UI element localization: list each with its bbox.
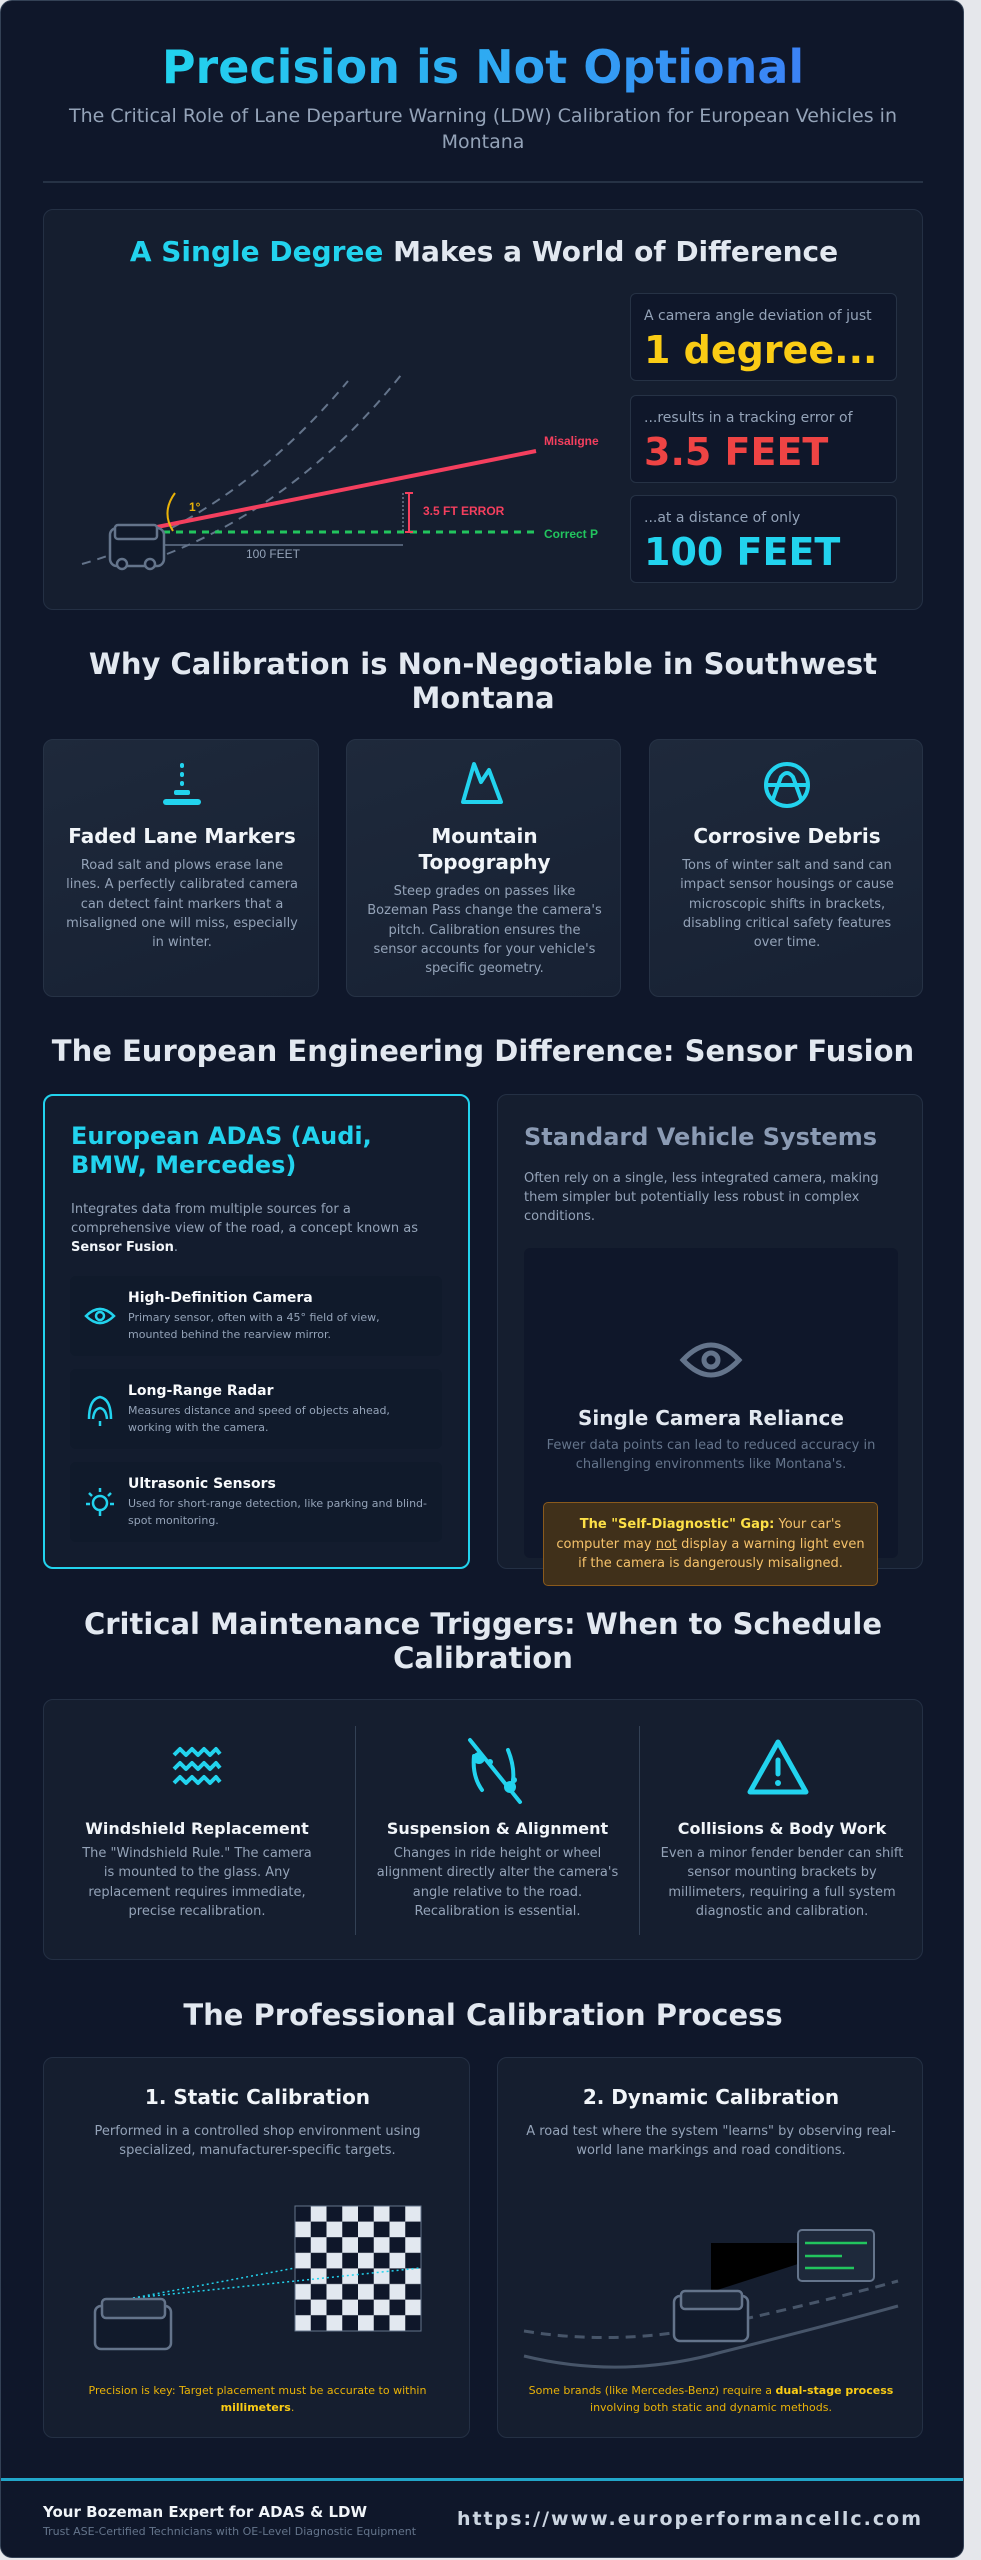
text: Performed in a controlled shop environment using specialized, manufacturer-specific targets. <box>95 2124 420 2158</box>
panel heading: A Single Degree Makes a World of Difference <box>130 235 838 268</box>
text: Even a minor fender bender can shift sensor mounting brackets by millimeters, requiring a full system diagnostic and calibration. <box>661 1846 903 1919</box>
sensor: ultrasonic: Used for short-range detection, like parking and blind-spot monitoring. <box>128 1497 427 1527</box>
card title: Topography <box>418 850 551 874</box>
diagram: misalignment: Misaligne <box>544 434 599 448</box>
trigger: windshield <box>82 1746 312 1919</box>
sensor: camera: High-Definition Camera <box>128 1290 313 1306</box>
stat: 3.5 feet: ...results in a tracking error of <box>644 410 853 426</box>
panel title: European ADAS (Audi, BMW, Mercedes) <box>71 1122 372 1179</box>
card title <box>418 824 551 874</box>
inner box: single camera <box>524 1248 898 1558</box>
icon: eye <box>680 1342 742 1378</box>
sensor: camera: Primary sensor, often with a 45° field of view, mounted behind the rearview mirror. <box>128 1311 380 1341</box>
callout: self-diagnostic gap <box>543 1502 878 1586</box>
card text: Tons of winter salt and sand can impact sensor housings or cause microscopic shifts in brackets, disabling critical safety features over time. <box>680 858 894 950</box>
diagram: misalignment: 3.5 FT ERROR <box>423 504 505 518</box>
panel text: Integrates data from multiple sources for a comprehensive view of the road, a concept known as Sensor Fusion. <box>71 1202 418 1255</box>
card text: Road salt and plows erase lane lines. A perfectly calibrated camera can detect faint markers that a misaligned one will miss, especially in winter. <box>66 858 298 950</box>
card title: Mountain <box>431 824 538 848</box>
diagram: misalignment: 1° <box>189 500 201 514</box>
text: Changes in ride height or wheel alignment directly alter the camera's angle relative to the road. Recalibration is essential. <box>377 1846 618 1919</box>
stat: 1 degree: 1 degree... <box>644 328 877 372</box>
diagram: misalignment: Correct P <box>544 527 598 541</box>
title: Windshield Replacement <box>85 1819 309 1838</box>
stat: 100 feet: 100 FEET <box>644 530 840 574</box>
footer tagline: Your Bozeman Expert for ADAS & LDW <box>43 2503 367 2521</box>
trigger: suspension <box>377 1738 618 1919</box>
subtitle: The Critical Role of Lane Departure Warning (LDW) Calibration for European Vehicles in Montana <box>69 105 897 153</box>
sensor: ultrasonic <box>70 1462 442 1542</box>
panel: standard systems <box>497 1094 923 1569</box>
stat: 1 degree <box>630 293 897 381</box>
stat: 3.5 feet <box>630 395 897 483</box>
stat: 1 degree: A camera angle deviation of just <box>644 308 872 324</box>
title: Suspension & Alignment <box>387 1819 608 1838</box>
panel: dynamic calibration <box>497 2057 923 2438</box>
icon: debris <box>764 762 810 808</box>
title: Precision is Not Optional <box>162 40 804 94</box>
stat: 100 feet: ...at a distance of only <box>644 510 800 526</box>
icon: lane markers <box>163 763 201 805</box>
note: Some brands (like Mercedes-Benz) require a dual-stage process involving both static and dynamic methods. <box>529 2384 893 2414</box>
title: Collisions & Body Work <box>678 1819 886 1838</box>
icon: waves <box>172 1746 222 1786</box>
panel: european adas <box>43 1094 470 1569</box>
diagram: misalignment: 100 FEET <box>246 547 301 561</box>
diagram: misalignment <box>82 375 599 570</box>
sensor: radar: Long-Range Radar <box>128 1383 274 1399</box>
panel: static calibration <box>43 2057 470 2438</box>
footer url: https://www.europerformancellc.com <box>457 2508 923 2530</box>
icon: warning <box>748 1740 808 1794</box>
illustration: target and car <box>94 2206 422 2350</box>
heading: why calibration: Why Calibration is Non-Negotiable in Southwest Montana <box>89 647 877 715</box>
footer subtext: Trust ASE-Certified Technicians with OE-Level Diagnostic Equipment <box>43 2525 416 2538</box>
card title: Corrosive Debris <box>693 824 881 848</box>
heading: maintenance triggers: Critical Maintenance Triggers: When to Schedule Calibration <box>84 1607 882 1675</box>
sensor: camera <box>70 1276 442 1356</box>
panel: single degree <box>43 209 923 610</box>
note: Precision is key: Target placement must be accurate to within millimeters. <box>89 2384 426 2414</box>
panel text: Often rely on a single, less integrated camera, making them simpler but potentially less robust in complex conditions. <box>524 1171 879 1224</box>
card title: Faded Lane Markers <box>68 824 296 848</box>
trigger: collisions <box>661 1740 904 1919</box>
card: corrosive debris <box>649 739 923 997</box>
stat: 3.5 feet: 3.5 FEET <box>644 430 828 474</box>
stat: 100 feet <box>630 495 897 583</box>
sensor: radar <box>70 1369 442 1449</box>
icon: suspension <box>468 1738 522 1804</box>
heading: calibration process: The Professional Calibration Process <box>183 1998 783 2032</box>
title: 2. Dynamic Calibration <box>583 2085 839 2109</box>
title: Single Camera Reliance <box>578 1406 844 1430</box>
sensor: radar: Measures distance and speed of objects ahead, working with the camera. <box>128 1404 390 1434</box>
panel: triggers <box>43 1699 923 1960</box>
footer <box>1 2478 965 2560</box>
card: faded lane markers <box>43 739 319 997</box>
panel title: Standard Vehicle Systems <box>524 1123 877 1151</box>
sensor: ultrasonic: Ultrasonic Sensors <box>128 1476 276 1492</box>
card: mountain topography <box>346 739 621 997</box>
card text: Steep grades on passes like Bozeman Pass change the camera's pitch. Calibration ensures the sensor accounts for your vehicle's specific geometry. <box>367 884 602 976</box>
text: The "Windshield Rule." The camera is mounted to the glass. Any replacement requires immediate, precise recalibration. <box>82 1846 312 1919</box>
illustration: road and screen <box>524 2229 898 2369</box>
heading: sensor fusion: The European Engineering Difference: Sensor Fusion <box>52 1034 914 1068</box>
text: A road test where the system "learns" by observing real-world lane markings and road conditions. <box>526 2124 896 2158</box>
text: Fewer data points can lead to reduced accuracy in challenging environments like Montana's. <box>547 1438 875 1472</box>
callout: self-diagnostic gap: The "Self-Diagnostic" Gap: Your car's computer may not display a warning light even if the camera is dangerously misaligned. <box>556 1517 865 1571</box>
icon: mountain <box>461 762 504 804</box>
title: 1. Static Calibration <box>145 2085 370 2109</box>
